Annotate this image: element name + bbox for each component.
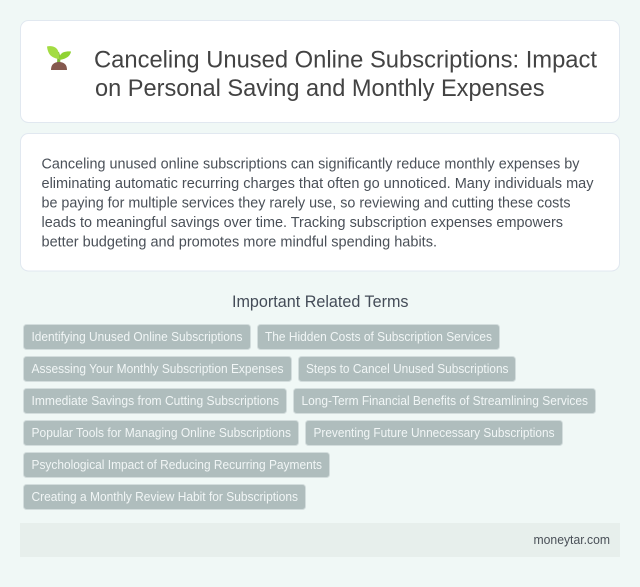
tag list [24, 324, 596, 510]
text block: summary paragraph: leads to meaningful savings over time. Tracking subscription expenses empowers [42, 214, 563, 231]
panel: header [20, 20, 620, 122]
tag: identifying: Identifying Unused Online Subscriptions [32, 329, 243, 344]
tag: preventing [306, 420, 562, 446]
tag: popular tools: Popular Tools for Managing Online Subscriptions [32, 425, 291, 440]
tag: identifying [24, 324, 250, 350]
text block: summary paragraph: better budgeting and promotes more mindful spending habits. [42, 233, 437, 250]
tag: steps [298, 356, 516, 382]
tag: long-term: Long-Term Financial Benefits of Streamlining Services [302, 393, 588, 408]
icon: seedling [47, 46, 71, 70]
tag: long-term [294, 388, 596, 414]
text block: summary paragraph: be paying for multiple services they rarely use, so reviewing and cutting these costs [42, 194, 570, 211]
tag: hidden costs [258, 324, 500, 350]
footer [20, 523, 620, 557]
heading: related terms: Important Related Terms [232, 293, 408, 311]
tag: immediate savings [24, 388, 286, 414]
tag: monthly review [24, 484, 306, 510]
footer: moneytar.com [534, 532, 610, 547]
tag: assessing: Assessing Your Monthly Subscription Expenses [32, 361, 284, 376]
tag: immediate savings: Immediate Savings from Cutting Subscriptions [32, 393, 279, 408]
text block: summary paragraph [42, 155, 594, 250]
panel: summary [20, 134, 620, 271]
text block: summary paragraph: Canceling unused online subscriptions can significantly reduce monthly expenses by [42, 155, 580, 172]
title: on Personal Saving and Monthly Expenses [95, 75, 544, 102]
tag: assessing [24, 356, 292, 382]
tag: psychological [24, 452, 330, 478]
title [94, 46, 597, 102]
tag: popular tools [24, 420, 298, 446]
tag: hidden costs: The Hidden Costs of Subscription Services [265, 329, 492, 344]
title: Canceling Unused Online Subscriptions: Impact [94, 46, 597, 74]
tag: monthly review: Creating a Monthly Review Habit for Subscriptions [32, 489, 298, 504]
tag: preventing: Preventing Future Unnecessary Subscriptions [314, 425, 555, 440]
text block: summary paragraph: eliminating automatic recurring charges that often go unnoticed. Many individuals may [42, 175, 594, 192]
tag: psychological: Psychological Impact of Reducing Recurring Payments [32, 457, 322, 472]
tag: steps: Steps to Cancel Unused Subscriptions [306, 361, 509, 376]
